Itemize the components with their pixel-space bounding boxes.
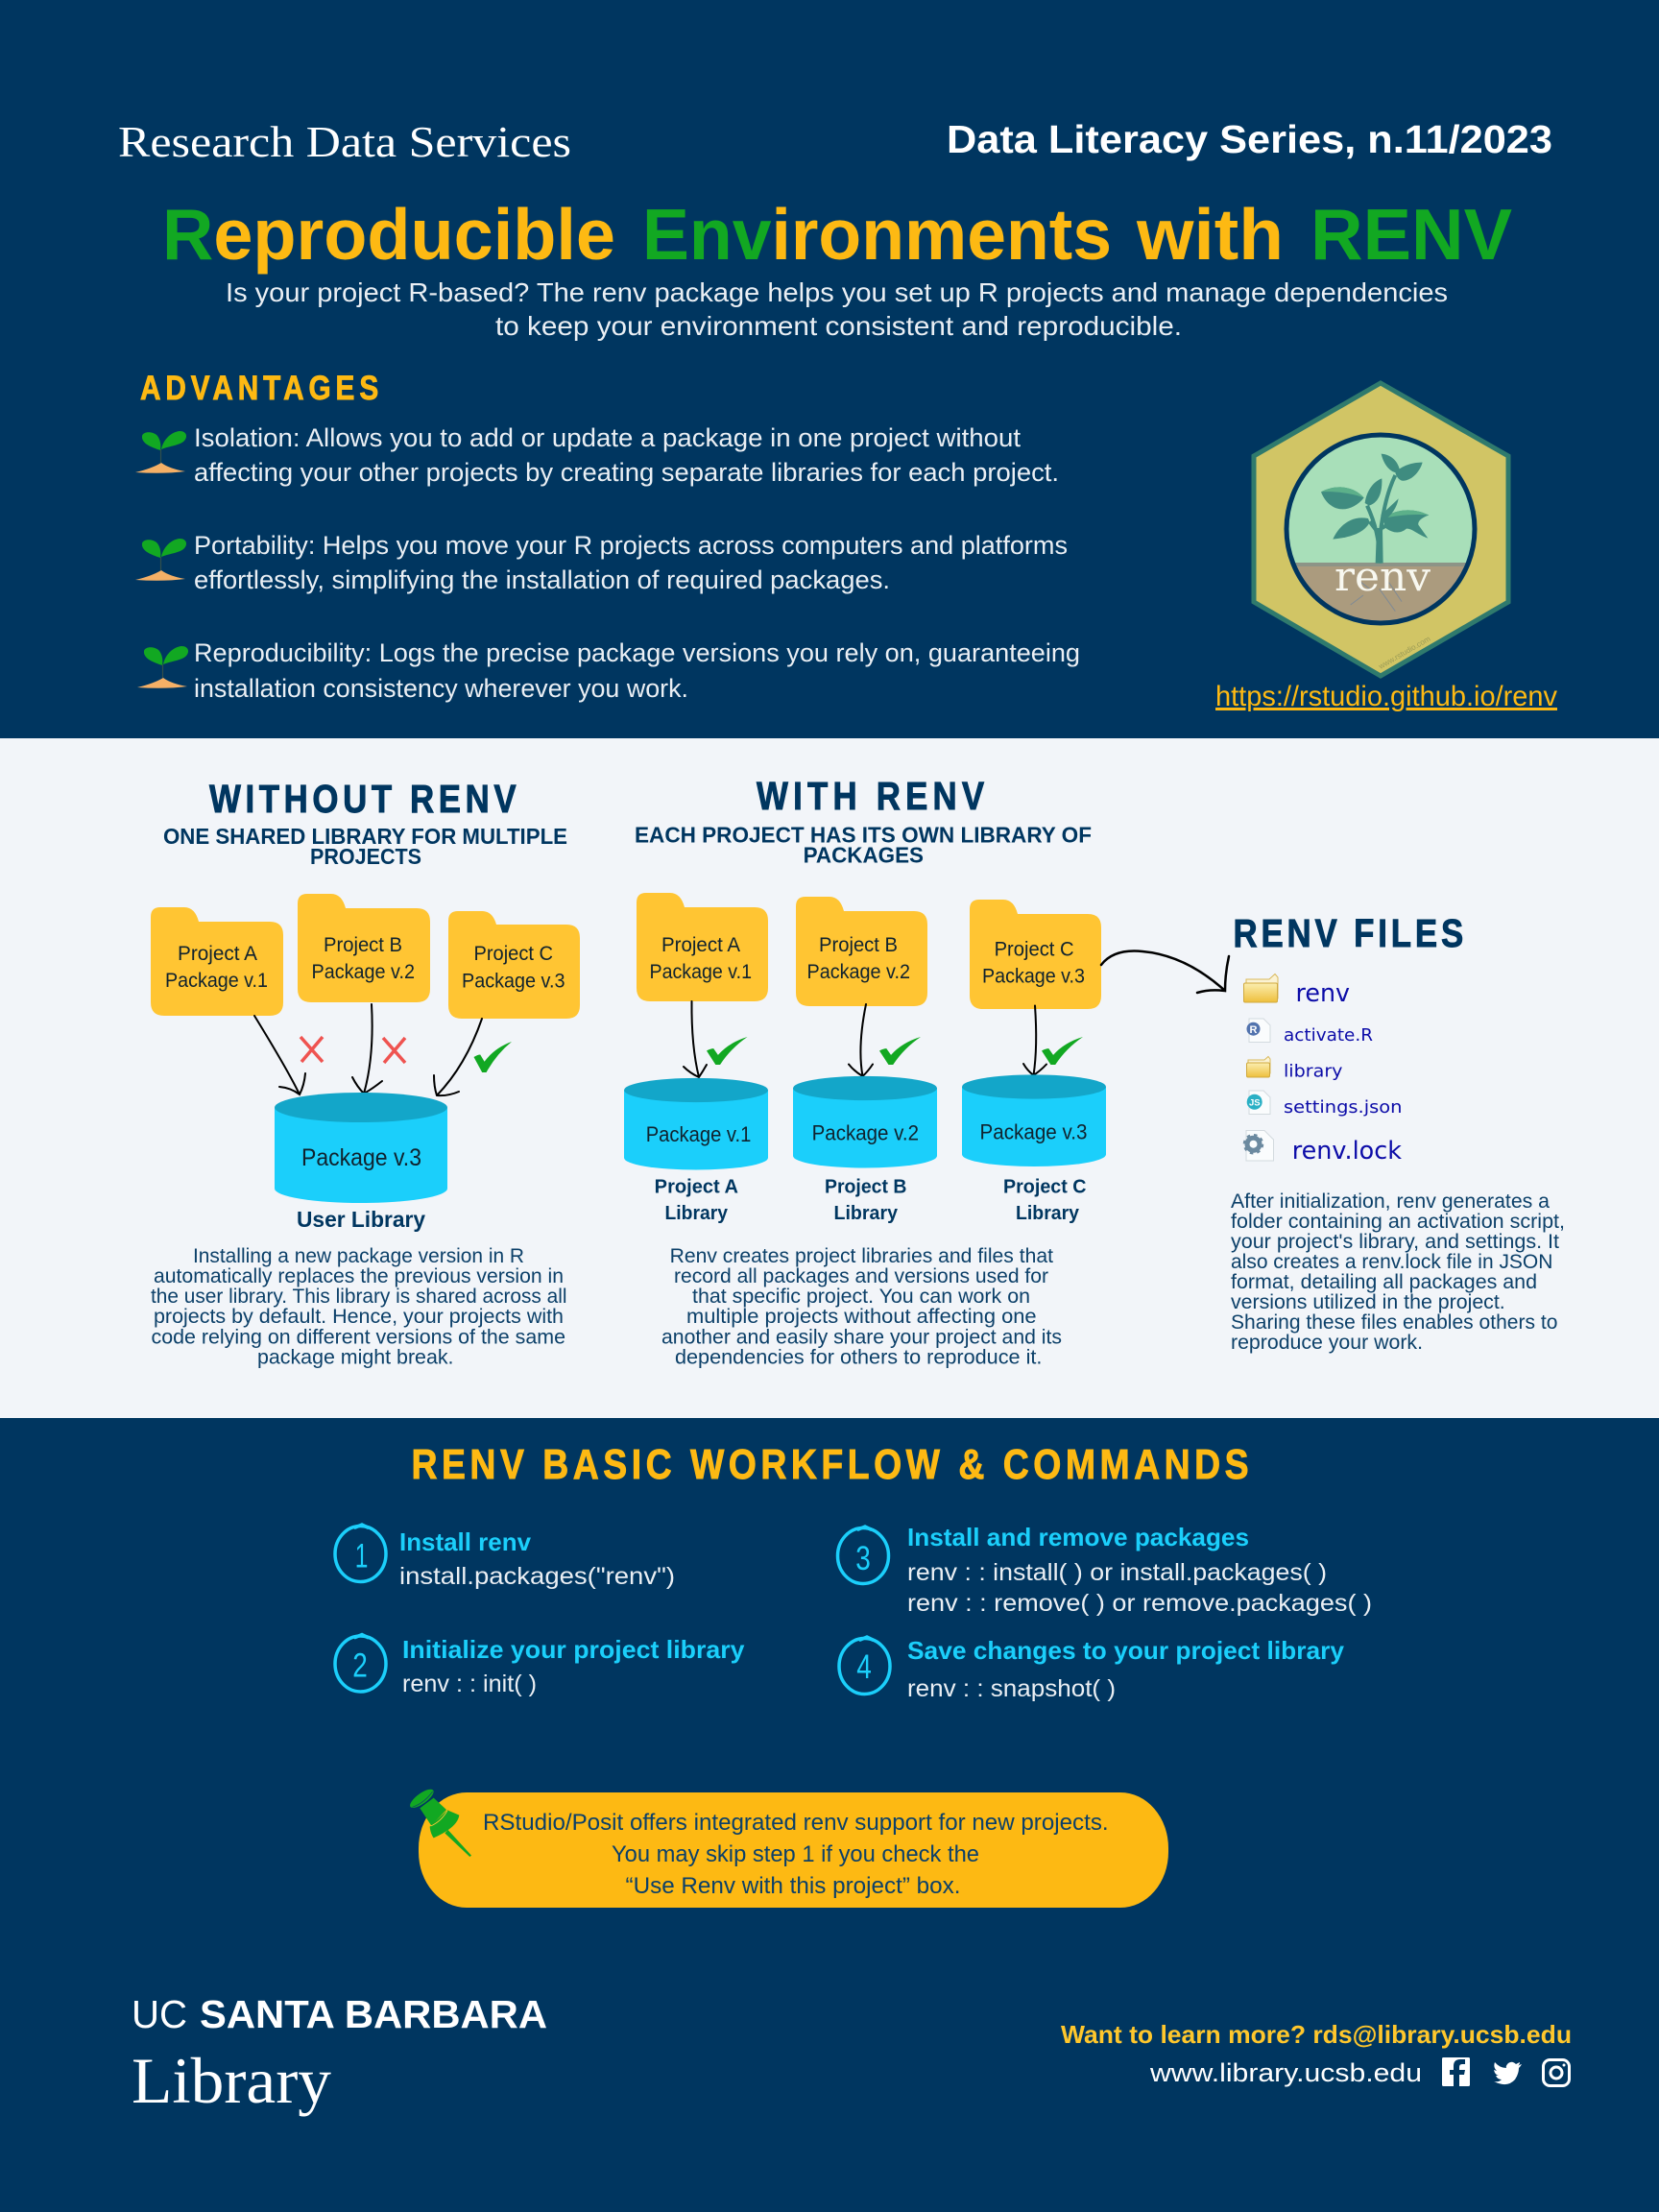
step 4 text bbox=[907, 1636, 1345, 1702]
text: isolation: affecting your other projects by creating separate libraries for each project. bbox=[194, 458, 1059, 487]
panel: workflow and commands bbox=[335, 1440, 1372, 1702]
arrow: A to user library bbox=[254, 1016, 305, 1094]
file: renv: renv bbox=[1296, 979, 1350, 1008]
text: portability: effortlessly, simplifying the installation of required packages. bbox=[194, 565, 890, 594]
icon: R file bbox=[1246, 1019, 1270, 1043]
heading: workflow: RENV BASIC WORKFLOW & COMMANDS bbox=[411, 1440, 1249, 1488]
arrow: B to library bbox=[849, 1004, 873, 1076]
step 2 text bbox=[402, 1635, 745, 1697]
icon: instagram bbox=[1544, 2060, 1569, 2085]
label: project B library bbox=[825, 1177, 906, 1224]
folder: project C: Package v.3 bbox=[462, 970, 565, 993]
file: renv.lock: renv.lock bbox=[1292, 1137, 1402, 1166]
text: without renv description: Installing a new package version in R bbox=[193, 1245, 524, 1267]
subheading: each project: PACKAGES bbox=[804, 843, 924, 868]
header: research data services: Research Data Services bbox=[118, 117, 571, 166]
cylinder: project C library: Package v.3 bbox=[979, 1119, 1087, 1144]
step 1 text: install.packages("renv") bbox=[399, 1563, 675, 1590]
folder: project B bbox=[298, 894, 430, 1002]
step 2 text: renv : : init( ) bbox=[402, 1671, 537, 1697]
text: renv files description: format, detailing all packages and bbox=[1231, 1271, 1537, 1293]
folder: project C: Package v.3 bbox=[982, 966, 1085, 987]
text: renv files description: your project's library, and settings. It bbox=[1231, 1231, 1559, 1253]
folder: project A: Project A bbox=[661, 934, 740, 956]
text: without renv description: the user library. This library is shared across all bbox=[151, 1286, 566, 1308]
folder: project A bbox=[637, 893, 768, 1001]
text: renv files description: folder containing an activation script, bbox=[1231, 1211, 1565, 1233]
heading: advantages: ADVANTAGES bbox=[140, 370, 378, 407]
folder: project A: Package v.1 bbox=[649, 961, 752, 983]
folder: project A: Project A bbox=[178, 943, 257, 965]
subheading: one shared library: PROJECTS bbox=[310, 844, 421, 869]
file: settings.json: settings.json bbox=[1284, 1097, 1402, 1118]
step 1 badge bbox=[335, 1525, 386, 1582]
file: library: library bbox=[1284, 1062, 1343, 1081]
text: isolation: Isolation: Allows you to add or update a package in one project without bbox=[194, 423, 1021, 452]
icon: library folder bbox=[1246, 1056, 1270, 1077]
link: renv website: https://rstudio.github.io/renv bbox=[1215, 681, 1557, 712]
text: renv files description: After initialization, renv generates a bbox=[1231, 1190, 1550, 1213]
text: renv files description bbox=[1231, 1190, 1565, 1354]
step 1 text bbox=[399, 1527, 675, 1590]
label: project A library: Library bbox=[664, 1203, 729, 1224]
footer: website: www.library.ucsb.edu bbox=[1149, 2058, 1422, 2087]
text: without renv description: projects by default. Hence, your projects with bbox=[154, 1306, 564, 1328]
heading: without renv: WITHOUT RENV bbox=[209, 778, 517, 822]
icon: seedling 1 bbox=[135, 431, 186, 473]
icon: red cross 1 bbox=[301, 1037, 323, 1062]
text: with renv description: dependencies for others to reproduce it. bbox=[675, 1346, 1042, 1369]
step 3 badge bbox=[837, 1527, 889, 1584]
step 3 badge: 3 bbox=[855, 1539, 871, 1577]
icon: green pushpin bbox=[407, 1786, 471, 1857]
step 3 text: Install and remove packages bbox=[907, 1523, 1249, 1551]
folder: project C bbox=[970, 900, 1101, 1009]
text: with renv description bbox=[661, 1245, 1062, 1369]
icon: twitter bbox=[1494, 2062, 1522, 2084]
arrow: project C to renv folder bbox=[1101, 951, 1229, 993]
text: with renv description: that specific project. You can work on bbox=[692, 1286, 1030, 1308]
icon: json file: JS bbox=[1249, 1098, 1261, 1108]
footer: ucsb library logo: Library bbox=[132, 2044, 331, 2117]
panel: with renv bbox=[624, 775, 1106, 1369]
cylinder: project B library: Package v.2 bbox=[812, 1121, 919, 1144]
icon: seedling 3 bbox=[137, 646, 188, 688]
callout: rstudio integration: RStudio/Posit offers integrated renv support for new projects. bbox=[483, 1810, 1109, 1836]
icon: green check bbox=[474, 1042, 512, 1072]
icon: renv hex logo: renv bbox=[1334, 553, 1431, 600]
title: RENV bbox=[1310, 194, 1512, 275]
folder: project A: Package v.1 bbox=[165, 970, 268, 992]
arrow: B to user library bbox=[352, 1004, 382, 1094]
footer: ucsb library logo: SANTA BARBARA bbox=[200, 1992, 547, 2036]
folder: project C: Project C bbox=[995, 939, 1074, 960]
subtitle: Is your project R-based? The renv package helps you set up R projects and manage dependencies bbox=[226, 277, 1448, 307]
label: project C library: Project C bbox=[1003, 1177, 1087, 1198]
folder: project A bbox=[151, 907, 283, 1016]
icon: renv hex logo: www.rstudio.com bbox=[1377, 635, 1432, 671]
footer: ucsb library logo bbox=[132, 1992, 547, 2117]
text: portability: Portability: Helps you move your R projects across computers and platforms bbox=[194, 531, 1068, 560]
subheading: one shared library: ONE SHARED LIBRARY FOR MULTIPLE bbox=[163, 824, 567, 849]
arrow: C to user library bbox=[434, 1019, 482, 1095]
cylinder: project C library bbox=[962, 1074, 1106, 1166]
step 4 text: Save changes to your project library bbox=[907, 1636, 1345, 1665]
label: project C library: Library bbox=[1016, 1203, 1080, 1224]
folder: project B: Project B bbox=[819, 934, 898, 956]
icon: red cross 2 bbox=[383, 1038, 405, 1063]
arrow: A to library bbox=[684, 1001, 707, 1077]
panel: renv files bbox=[1101, 912, 1565, 1354]
text: with renv description: multiple projects without affecting one bbox=[686, 1306, 1037, 1328]
file: activate.R: activate.R bbox=[1284, 1025, 1373, 1046]
text: with renv description: Renv creates project libraries and files that bbox=[670, 1245, 1053, 1267]
subtitle: to keep your environment consistent and reproducible. bbox=[495, 311, 1182, 341]
step 4 badge: 4 bbox=[856, 1647, 872, 1686]
subheading: each project bbox=[635, 822, 1092, 868]
text: renv files description: reproduce your work. bbox=[1231, 1332, 1423, 1354]
step 2 badge: 2 bbox=[352, 1646, 368, 1684]
cylinder: user library bbox=[275, 1093, 447, 1203]
step 1 text: Install renv bbox=[399, 1527, 532, 1556]
arrow: C to library bbox=[1023, 1006, 1046, 1075]
heading: with renv: WITH RENV bbox=[757, 775, 985, 819]
cylinder: project B library bbox=[793, 1076, 937, 1167]
subheading: one shared library bbox=[163, 824, 567, 869]
step 1 badge: 1 bbox=[355, 1538, 368, 1575]
panel: advantages bbox=[135, 370, 1080, 703]
text: without renv description bbox=[151, 1245, 566, 1369]
heading: renv files: RENV FILES bbox=[1233, 912, 1463, 956]
label: project B library: Library bbox=[833, 1203, 899, 1224]
label: project A library bbox=[655, 1177, 738, 1224]
label: project C library bbox=[1003, 1177, 1087, 1224]
icon: R file: R bbox=[1250, 1024, 1258, 1036]
text: renv files description: also creates a renv.lock file in JSON bbox=[1231, 1251, 1552, 1273]
folder: project C: Project C bbox=[474, 943, 553, 965]
folder: project B: Project B bbox=[324, 934, 402, 956]
text: isolation bbox=[194, 423, 1059, 487]
subtitle bbox=[226, 277, 1448, 341]
icon: green check A bbox=[707, 1037, 747, 1065]
folder: project B: Package v.2 bbox=[311, 961, 415, 983]
subheading: each project: EACH PROJECT HAS ITS OWN LIBRARY OF bbox=[635, 822, 1092, 847]
icon: seedling 2 bbox=[135, 539, 186, 581]
footer: ucsb library logo: UC bbox=[132, 1992, 187, 2036]
callout: rstudio integration bbox=[419, 1792, 1168, 1908]
folder: project C bbox=[448, 911, 580, 1019]
text: renv files description: versions utilized in the project. bbox=[1231, 1291, 1505, 1313]
panel: without renv bbox=[151, 778, 580, 1369]
label: user library: User Library bbox=[297, 1207, 425, 1232]
title: Reproducible bbox=[162, 194, 615, 275]
footer: contact: Want to learn more? rds@library.ucsb.edu bbox=[1061, 2020, 1572, 2049]
header: series label: Data Literacy Series, n.11/2023 bbox=[947, 117, 1552, 161]
cylinder: user library: Package v.3 bbox=[301, 1144, 421, 1171]
folder: project B: Package v.2 bbox=[806, 961, 910, 983]
icon: renv hex logo bbox=[1254, 383, 1508, 676]
step 3 text: renv : : install( ) or install.packages( ) bbox=[907, 1559, 1327, 1586]
step 3 text: renv : : remove( ) or remove.packages( ) bbox=[907, 1590, 1372, 1617]
step 3 text bbox=[907, 1523, 1372, 1617]
step 2 text: Initialize your project library bbox=[402, 1635, 745, 1664]
step 4 badge bbox=[839, 1637, 890, 1694]
text: without renv description: code relying on different versions of the same bbox=[152, 1327, 565, 1348]
text: with renv description: record all packages and versions used for bbox=[674, 1265, 1048, 1287]
text: with renv description: another and easily share your project and its bbox=[661, 1327, 1062, 1348]
icon: renv folder bbox=[1244, 974, 1278, 1002]
text: without renv description: automatically replaces the previous version in bbox=[154, 1265, 564, 1287]
icon: json file bbox=[1247, 1091, 1270, 1114]
callout: rstudio integration: “Use Renv with this project” box. bbox=[626, 1873, 960, 1899]
icon: green check B bbox=[879, 1037, 921, 1065]
icon: lock file bbox=[1244, 1131, 1273, 1161]
icon: green check C bbox=[1042, 1037, 1083, 1065]
title: Environments bbox=[642, 194, 1112, 275]
step 4 text: renv : : snapshot( ) bbox=[907, 1675, 1116, 1702]
folder: project B bbox=[796, 897, 927, 1006]
callout: rstudio integration: You may skip step 1 if you check the bbox=[612, 1841, 979, 1867]
label: project B library: Project B bbox=[825, 1177, 906, 1198]
cylinder: project A library bbox=[624, 1078, 768, 1169]
title bbox=[162, 194, 1512, 275]
title: with bbox=[1136, 194, 1284, 275]
text: renv files description: Sharing these files enables others to bbox=[1231, 1311, 1557, 1334]
cylinder: project A library: Package v.1 bbox=[646, 1122, 751, 1146]
text: without renv description: package might break. bbox=[257, 1346, 453, 1369]
icon: facebook bbox=[1442, 2057, 1470, 2086]
step 2 badge bbox=[335, 1634, 386, 1692]
text: reproducibility: Reproducibility: Logs the precise package versions you rely on, guaranteeing bbox=[194, 638, 1080, 667]
text: reproducibility: installation consistency wherever you work. bbox=[194, 674, 688, 703]
text: reproducibility bbox=[194, 638, 1080, 703]
label: project A library: Project A bbox=[655, 1177, 738, 1198]
text: portability bbox=[194, 531, 1068, 594]
